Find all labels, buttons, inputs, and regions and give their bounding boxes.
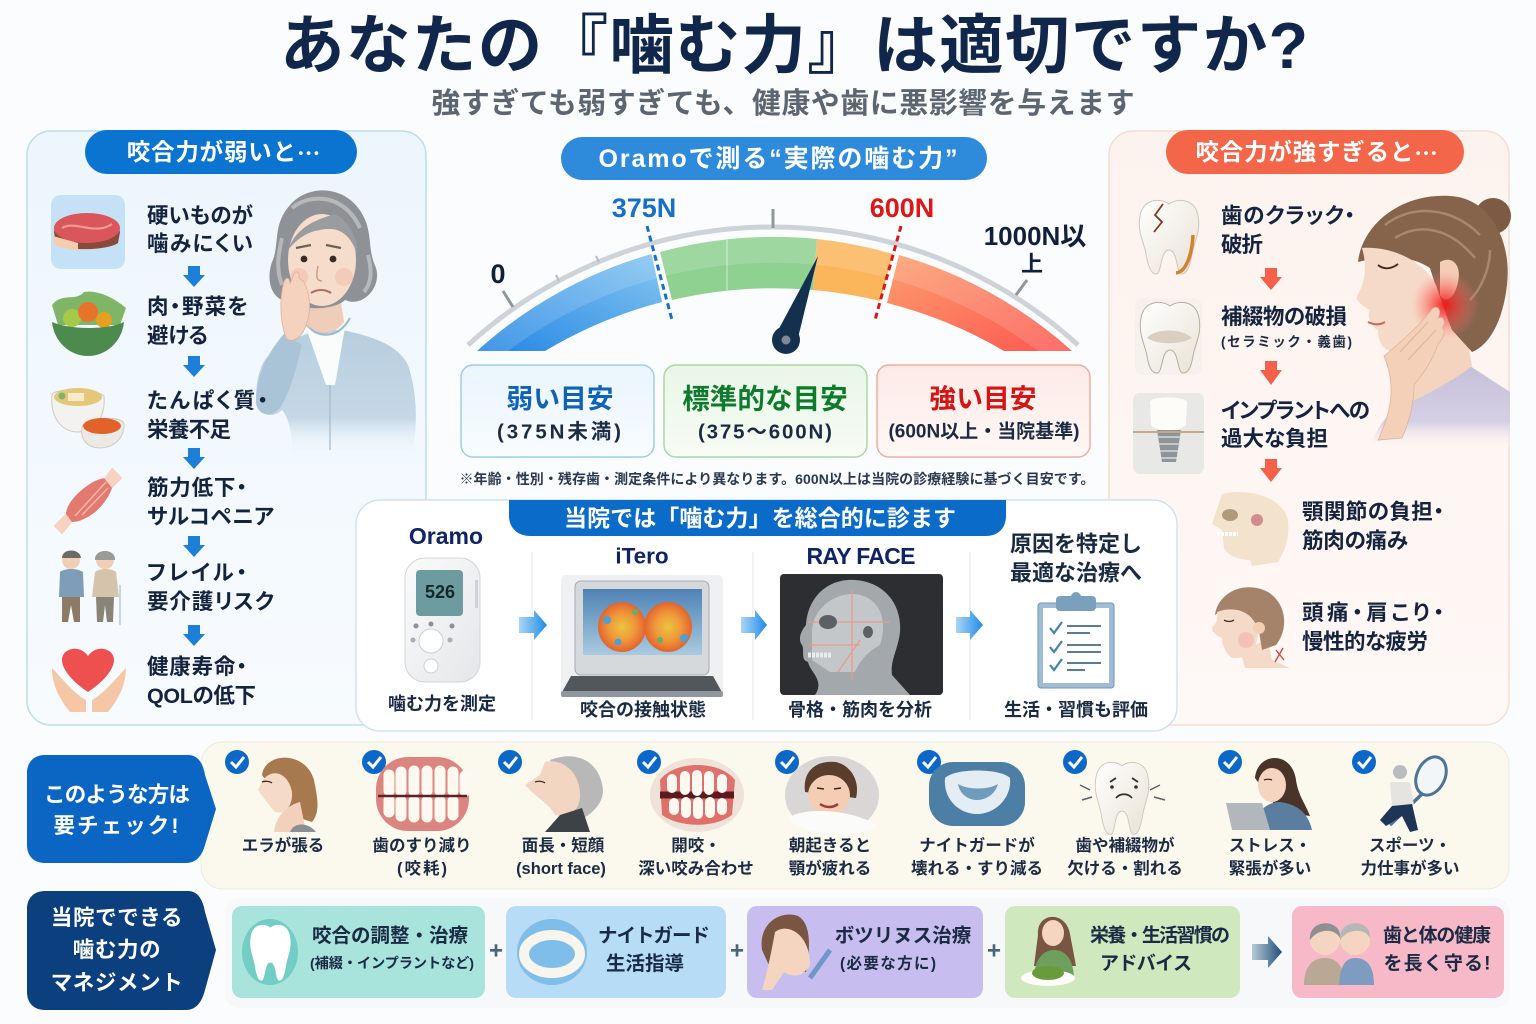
card: occlusal adjustment: (補綴・インプラントなど) bbox=[310, 955, 474, 972]
icon: skull bbox=[1212, 492, 1288, 566]
check item: broken nightguard: 壊れる・すり減る bbox=[911, 859, 1043, 878]
card: nightguard: 生活指導 bbox=[606, 952, 684, 975]
step: iTero: iTero bbox=[615, 544, 669, 568]
tag: check these: このような方は bbox=[44, 783, 190, 807]
gauge chart bbox=[468, 193, 1086, 354]
check item: stress: ストレス・ bbox=[1229, 837, 1311, 855]
heading: Oramo gauge bbox=[561, 137, 987, 180]
icon: check bbox=[775, 750, 799, 774]
item: restoration damage: (セラミック・義歯) bbox=[1221, 334, 1352, 350]
heading: weak bbox=[85, 130, 357, 174]
icon: woman with syringe bbox=[762, 914, 830, 990]
step: Oramo: 噛む力を測定 bbox=[388, 694, 496, 714]
arrow bbox=[1260, 361, 1282, 385]
item: tooth crack: 破折 bbox=[1221, 233, 1263, 257]
illustration: worn teeth bbox=[376, 757, 469, 831]
item: protein and nutrition deficit: たんぱく質・ bbox=[147, 389, 268, 413]
item: tooth crack bbox=[1139, 200, 1355, 274]
item: TMJ pain bbox=[1212, 492, 1444, 566]
icon: tooth bbox=[242, 919, 298, 985]
card: botox: (必要な方に) bbox=[840, 954, 936, 972]
icon: check bbox=[1218, 750, 1242, 774]
item: frailty: 要介護リスク bbox=[147, 590, 274, 614]
icon: clipboard bbox=[1038, 592, 1114, 688]
item: frailty bbox=[59, 550, 274, 625]
item: headache and fatigue: 慢性的な疲労 bbox=[1302, 630, 1428, 654]
heading tab: 当院では「噛む力」を総合的に診ます bbox=[564, 505, 956, 531]
tag: management: マネジメント bbox=[51, 971, 183, 995]
arrow bbox=[183, 356, 205, 377]
illustration: man in bed bbox=[785, 756, 879, 834]
icon: check bbox=[498, 750, 522, 774]
step: RAY FACE: RAY FACE bbox=[806, 543, 916, 569]
icon: iTero laptop with occlusal scan bbox=[561, 575, 723, 697]
card: standard range: 標準的な目安 bbox=[682, 384, 848, 414]
icon: nightguard bbox=[517, 919, 587, 985]
step: RAY FACE: 骨格・筋肉を分析 bbox=[788, 700, 932, 720]
tag: management: 当院でできる bbox=[51, 906, 183, 930]
title: あなたの『噛む力』は適切ですか? bbox=[280, 10, 1308, 82]
step: diagnose and treat: 最適な治療へ bbox=[1010, 560, 1142, 586]
illustration: woman jaw bbox=[258, 758, 318, 832]
threshold: 600N bbox=[870, 193, 934, 320]
step: Oramo bbox=[388, 523, 496, 714]
plus: + bbox=[987, 938, 1001, 964]
icon: bowls bbox=[52, 388, 124, 448]
item: headache and fatigue: 頭痛・肩こり・ bbox=[1302, 601, 1444, 625]
arrow bbox=[1260, 268, 1282, 290]
icon: check bbox=[1352, 750, 1376, 774]
heading: strong: 咬合力が強すぎると… bbox=[1195, 135, 1439, 169]
heading: Oramo gauge: Oramoで測る“実際の噛む力” bbox=[598, 145, 958, 173]
icon: muscle bbox=[54, 468, 122, 534]
icon: cracked tooth bbox=[1139, 200, 1199, 274]
item: healthy life expectancy: 健康寿命・ bbox=[147, 655, 247, 679]
check item: chipped tooth: 歯や補綴物が bbox=[1076, 835, 1175, 855]
check item: tooth wear: 歯のすり減り bbox=[372, 836, 472, 855]
step: iTero bbox=[561, 544, 723, 720]
threshold: 375N bbox=[612, 193, 676, 320]
arrow bbox=[519, 610, 547, 640]
arrow bbox=[741, 610, 767, 640]
step: diagnose and treat: 原因を特定し bbox=[1010, 532, 1142, 556]
plus: + bbox=[730, 938, 744, 964]
icon: steak bbox=[51, 195, 125, 269]
icon: Oramo device bbox=[405, 558, 480, 682]
check item: broken nightguard: ナイトガードが bbox=[919, 835, 1035, 855]
check item: open bite: 深い咬み合わせ bbox=[638, 859, 754, 878]
icon: check bbox=[917, 750, 941, 774]
panel: gauge section bbox=[460, 137, 1094, 487]
arrow bbox=[183, 448, 205, 469]
step: RAY FACE bbox=[780, 543, 943, 720]
step: iTero: 咬合の接触状態 bbox=[580, 699, 706, 720]
check item: sports: 力仕事が多い bbox=[1360, 858, 1460, 878]
card: nutrition: アドバイス bbox=[1100, 952, 1192, 974]
footnote: ※年齢・性別・残存歯・測定条件により異なります。600N以上は当院の診療経験に基づく目安です。 bbox=[460, 471, 1094, 487]
arrow bbox=[956, 610, 983, 640]
plus: + bbox=[489, 938, 503, 964]
item: muscle loss: サルコペニア bbox=[147, 505, 274, 529]
check item: tooth wear bbox=[362, 750, 472, 878]
arrow bbox=[183, 536, 205, 557]
label: 1000N bbox=[984, 221, 1086, 276]
label: 0: 0 bbox=[490, 259, 506, 289]
threshold: 600N: 600N bbox=[870, 193, 934, 223]
card: nightguard: ナイトガード bbox=[598, 925, 710, 947]
illustration: woman at laptop bbox=[1226, 758, 1312, 830]
check item: chipped tooth bbox=[1063, 750, 1183, 878]
arrow bbox=[1260, 459, 1282, 482]
label: 1000N: 上 bbox=[1021, 252, 1043, 276]
item: avoid meat and vegetables bbox=[52, 292, 248, 356]
icon: senior couple bbox=[1304, 923, 1374, 985]
item: implant overload bbox=[1133, 393, 1370, 474]
item: healthy life expectancy: QOLの低下 bbox=[147, 684, 256, 708]
icon: check bbox=[362, 750, 386, 774]
item: hard foods: 硬いものが bbox=[147, 203, 254, 228]
card: weak range bbox=[461, 365, 654, 457]
gauge segment: caution bbox=[813, 239, 893, 301]
item: hard foods: 噛みにくい bbox=[147, 232, 253, 256]
card: strong range: (600N以上・当院基準) bbox=[888, 420, 1080, 442]
icon: check bbox=[1063, 750, 1087, 774]
icon: salad bowl bbox=[52, 292, 126, 356]
gauge segment: standard bbox=[660, 237, 817, 300]
check item: sports bbox=[1352, 750, 1460, 878]
item: tooth crack: 歯のクラック・ bbox=[1221, 204, 1355, 228]
tag: management: 噛む力の bbox=[73, 938, 161, 962]
card: occlusal adjustment bbox=[232, 906, 485, 998]
icon: elderly couple bbox=[59, 550, 120, 625]
check item: open bite: 開咬・ bbox=[671, 836, 721, 855]
illustration: open bite teeth bbox=[650, 758, 744, 832]
card: long-term health bbox=[1292, 906, 1504, 998]
step: diagnose and treat bbox=[1004, 532, 1148, 720]
illustration: worried older woman bbox=[256, 190, 416, 452]
card: standard range bbox=[664, 365, 867, 457]
arrow bbox=[1252, 936, 1282, 968]
check item: morning jaw fatigue bbox=[775, 750, 879, 878]
panel: weak bite force bbox=[27, 130, 426, 725]
card: botox bbox=[747, 906, 983, 998]
check item: jaw bbox=[225, 750, 324, 855]
illustration: woman with jaw pain bbox=[1357, 196, 1511, 446]
card: long-term health: を長く守る! bbox=[1384, 952, 1490, 974]
card: weak range: (375N未満) bbox=[497, 420, 621, 444]
icon: check bbox=[225, 750, 249, 774]
label: 1000N: 1000N以 bbox=[984, 221, 1086, 251]
card: strong range bbox=[877, 365, 1090, 457]
tag: check these bbox=[27, 755, 216, 863]
needle bbox=[772, 256, 818, 354]
check item: tooth wear: (咬耗) bbox=[397, 859, 447, 878]
heading: strong bbox=[1166, 130, 1464, 174]
check item: face type: (short face) bbox=[516, 860, 606, 878]
gauge segment: strong bbox=[887, 255, 1072, 351]
threshold: 375N: 375N bbox=[612, 193, 676, 223]
check item: face type: 面長・短顔 bbox=[522, 836, 605, 855]
gauge segment: weak bbox=[477, 254, 662, 351]
panel: excessive bite force bbox=[1109, 130, 1511, 725]
item: restoration damage bbox=[1135, 298, 1352, 375]
panel: comprehensive diagnosis bbox=[356, 500, 1177, 731]
step: diagnose and treat: 生活・習慣も評価 bbox=[1004, 700, 1148, 720]
icon: implant bbox=[1133, 393, 1204, 474]
panel: checklist background bbox=[201, 742, 1509, 889]
item: implant overload: 過大な負担 bbox=[1221, 427, 1328, 451]
item: restoration damage: 補綴物の破損 bbox=[1221, 305, 1347, 329]
check item: chipped tooth: 欠ける・割れる bbox=[1067, 858, 1183, 878]
item: avoid meat and vegetables: 避ける bbox=[147, 324, 208, 348]
icon: heart and hands bbox=[52, 649, 126, 712]
check item: face type bbox=[498, 750, 606, 878]
arrow bbox=[183, 266, 205, 287]
tag: management bbox=[27, 891, 216, 1010]
item: protein and nutrition deficit: 栄養不足 bbox=[147, 418, 231, 442]
icon: crown tooth bbox=[1135, 298, 1202, 375]
icon: head profile bbox=[1212, 587, 1290, 668]
subtitle: 強すぎても弱すぎても、健康や歯に悪影響を与えます bbox=[432, 88, 1134, 120]
item: frailty: フレイル・ bbox=[147, 561, 247, 585]
panel: management row background bbox=[225, 898, 1510, 1008]
illustration: tennis player bbox=[1380, 752, 1452, 832]
check item: broken nightguard bbox=[911, 750, 1043, 878]
item: avoid meat and vegetables: 肉・野菜を bbox=[147, 295, 248, 319]
item: protein and nutrition deficit bbox=[52, 388, 268, 448]
arrow bbox=[183, 625, 205, 646]
item: muscle loss: 筋力低下・ bbox=[147, 476, 247, 500]
card: nutrition bbox=[1005, 906, 1240, 998]
check item: open bite bbox=[637, 750, 754, 878]
item: implant overload: インプラントへの bbox=[1221, 399, 1370, 423]
heading tab bbox=[509, 500, 1006, 536]
check item: stress: 緊張が多い bbox=[1229, 858, 1311, 878]
heading: weak: 咬合力が弱いと… bbox=[127, 135, 321, 169]
card: long-term health: 歯と体の健康 bbox=[1383, 924, 1491, 946]
illustration: sad tooth bbox=[1080, 762, 1165, 834]
icon: Oramo device: 526 bbox=[425, 582, 455, 602]
card: nutrition: 栄養・生活習慣の bbox=[1090, 924, 1230, 946]
icon: woman with salad bbox=[1021, 917, 1076, 986]
check item: sports: スポーツ・ bbox=[1369, 835, 1451, 855]
check item: morning jaw fatigue: 朝起きると bbox=[789, 836, 871, 855]
icon: check bbox=[637, 750, 661, 774]
check item: jaw: エラが張る bbox=[242, 835, 324, 855]
tag: check these: 要チェック! bbox=[54, 814, 178, 838]
item: headache and fatigue bbox=[1212, 587, 1444, 668]
card: weak range: 弱い目安 bbox=[506, 384, 614, 414]
card: nightguard bbox=[506, 906, 726, 998]
illustration: short face bbox=[525, 756, 603, 832]
item: TMJ pain: 筋肉の痛み bbox=[1302, 529, 1408, 553]
card: strong range: 強い目安 bbox=[929, 384, 1037, 414]
step: Oramo: Oramo bbox=[409, 523, 483, 549]
icon: cephalometric skull bbox=[780, 574, 943, 695]
item: TMJ pain: 顎関節の負担・ bbox=[1302, 500, 1444, 524]
item: hard foods bbox=[51, 195, 254, 269]
item: muscle loss bbox=[54, 468, 274, 534]
item: healthy life expectancy bbox=[52, 649, 256, 712]
card: standard range: (375〜600N) bbox=[698, 420, 832, 444]
card: occlusal adjustment: 咬合の調整・治療 bbox=[312, 925, 468, 947]
check item: stress bbox=[1218, 750, 1312, 878]
illustration: nightguard bbox=[929, 762, 1025, 826]
check item: morning jaw fatigue: 顎が疲れる bbox=[789, 858, 871, 878]
card: botox: ボツリヌス治療 bbox=[835, 925, 972, 947]
